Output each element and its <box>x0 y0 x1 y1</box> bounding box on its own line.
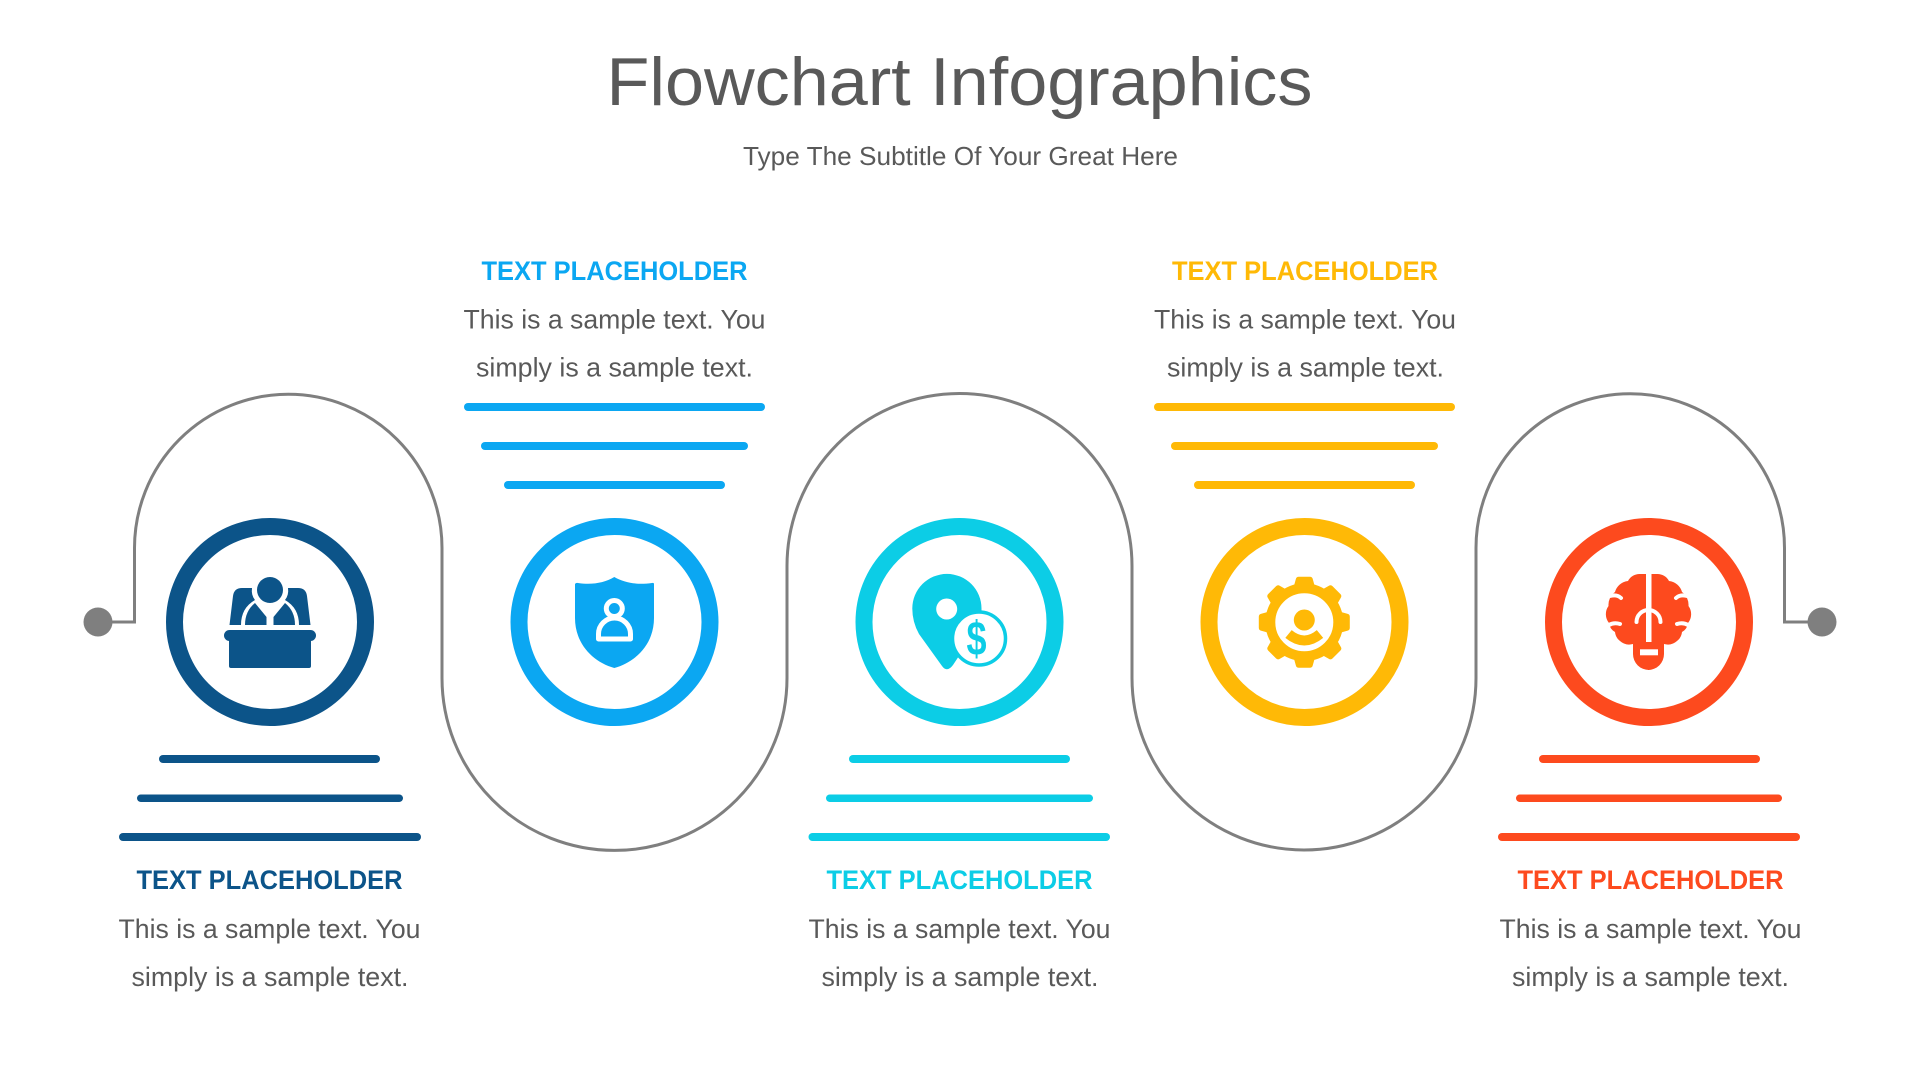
icon: brain light bulb <box>1606 574 1691 670</box>
bars 2 <box>464 403 765 489</box>
body 3: simply is a sample text. <box>822 962 1098 992</box>
body 4: simply is a sample text. <box>1167 352 1444 382</box>
flow connector line <box>84 394 1836 850</box>
bars 4 <box>1154 403 1455 489</box>
ring 5 <box>1554 526 1744 718</box>
panel: step 4 yellow <box>1154 256 1456 718</box>
bars 5 <box>1498 755 1800 841</box>
heading 4: TEXT PLACEHOLDER <box>1172 256 1438 286</box>
heading 5: TEXT PLACEHOLDER <box>1518 865 1784 895</box>
body 5: This is a sample text. You <box>1500 914 1802 944</box>
body 1 <box>118 914 420 992</box>
body 1: simply is a sample text. <box>132 962 408 992</box>
panel: step 5 red <box>1498 526 1802 992</box>
body 5: simply is a sample text. <box>1512 962 1789 992</box>
panel: step 2 blue <box>464 256 766 718</box>
heading 1: TEXT PLACEHOLDER <box>136 865 402 895</box>
ring 2 <box>519 526 710 718</box>
body 5 <box>1500 914 1802 992</box>
body 3: This is a sample text. You <box>808 914 1110 944</box>
body 1: This is a sample text. You <box>118 914 420 944</box>
body 4 <box>1154 304 1456 382</box>
body 2: simply is a sample text. <box>476 352 753 382</box>
icon: location pin with dollar coin: $ <box>966 612 987 665</box>
title: Flowchart Infographics <box>606 44 1312 120</box>
icon: gear with person <box>1259 577 1350 668</box>
bars 3 <box>808 755 1110 841</box>
icon: shield with person <box>575 577 654 668</box>
panel: step 3 cyan <box>808 526 1110 992</box>
body 2 <box>464 304 766 382</box>
body 3 <box>808 914 1110 992</box>
ring 3 <box>864 526 1055 718</box>
heading 2: TEXT PLACEHOLDER <box>482 256 748 286</box>
body 2: This is a sample text. You <box>464 304 766 334</box>
icon: speaker at desk <box>224 577 316 668</box>
icon: location pin with dollar coin <box>912 574 1006 669</box>
bars 1 <box>119 755 421 841</box>
subtitle: Type The Subtitle Of Your Great Here <box>743 141 1178 171</box>
body 4: This is a sample text. You <box>1154 304 1456 334</box>
ring 1 <box>174 526 366 718</box>
heading 3: TEXT PLACEHOLDER <box>826 865 1092 895</box>
panel: step 1 navy <box>118 526 421 992</box>
ring 4 <box>1209 526 1400 718</box>
